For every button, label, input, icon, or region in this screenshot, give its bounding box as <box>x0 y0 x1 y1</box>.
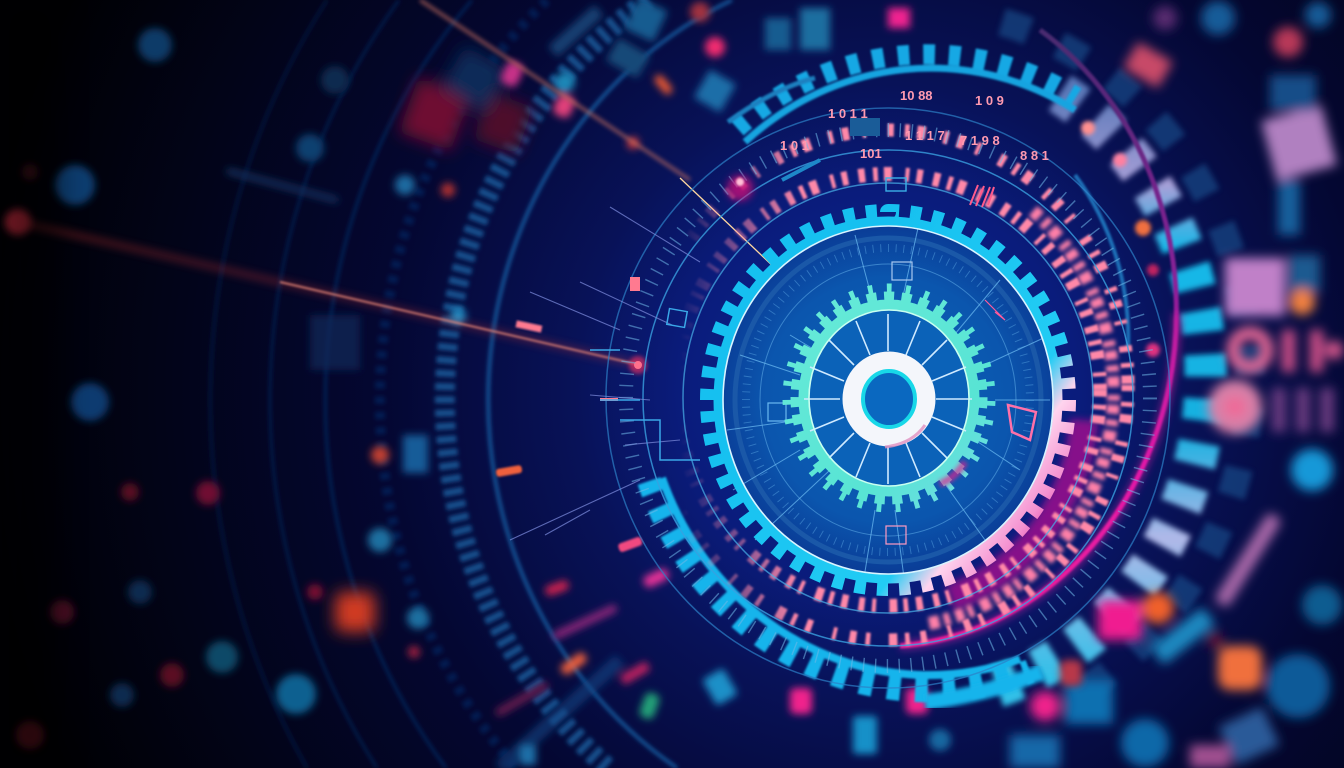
pink hatch top right <box>970 185 994 207</box>
small gear band <box>804 305 974 491</box>
digit labels in the ticks: 10 88 <box>900 88 933 103</box>
right outer gear bars <box>990 22 1250 691</box>
right ring accent dots <box>1081 121 1160 357</box>
hub pink shadow <box>885 425 925 447</box>
small gear tooth bases <box>795 296 983 500</box>
small gear spokes <box>804 314 972 484</box>
bottom cyan band <box>925 672 1042 702</box>
magenta hotspot <box>727 175 753 201</box>
digit labels in the ticks: 8 8 1 <box>1020 148 1049 163</box>
top left cyan arc <box>728 78 815 122</box>
mid gear teeth <box>708 212 1068 588</box>
mid ring arcs <box>606 108 1170 688</box>
right thin blue arc <box>1075 175 1128 350</box>
top blurred data blocks <box>499 0 910 149</box>
right side blurred data blocks <box>1010 1 1342 768</box>
disc glyph boxes <box>768 262 1036 544</box>
white hub ring <box>852 361 926 437</box>
digit labels in the ticks: 7 1 9 8 <box>960 133 1000 148</box>
orange streak from top <box>420 0 835 325</box>
far left blurred data dots <box>16 28 466 749</box>
dense pink blobs on right <box>927 211 1114 624</box>
far left concentric rings <box>210 0 732 768</box>
top outer gear <box>737 54 1076 142</box>
thin radial lines left <box>510 207 700 540</box>
blue glyph boxes left <box>590 309 700 460</box>
red data streak from left <box>5 209 647 374</box>
magenta outer ring <box>900 30 1177 646</box>
digit labels in the ticks: 101 <box>860 146 882 161</box>
lower outer gear <box>649 478 1030 690</box>
digit labels in the ticks <box>780 88 1049 163</box>
top left red blocks <box>399 46 533 154</box>
bottom blurred data blocks <box>494 567 1082 768</box>
disc circuit lines <box>727 228 1050 590</box>
digit labels in the ticks: 1 1 1 7 <box>905 128 945 143</box>
small gear inner rim <box>809 310 969 486</box>
cyan hub centre <box>863 371 915 427</box>
mid gear disc <box>723 226 1053 574</box>
magenta glow behind gear lower right <box>950 420 1084 598</box>
small gear hub disc <box>809 310 969 486</box>
digit labels in the ticks: 1 0 1 <box>780 138 809 153</box>
pink highlight on gear lower right <box>940 462 965 484</box>
small gear tooth tips <box>787 288 991 508</box>
blue box glyph top <box>782 118 906 191</box>
small pink marks left of gears <box>496 277 643 553</box>
orange glow block <box>335 592 375 632</box>
mid gear inner rim <box>723 226 1053 574</box>
mid gear band <box>718 221 1058 579</box>
digit labels in the ticks: 1 0 9 <box>975 93 1004 108</box>
pink digit ticks ring <box>648 130 1128 640</box>
outer vignette left <box>0 0 60 768</box>
digit labels in the ticks: 1 0 1 1 <box>828 106 868 121</box>
